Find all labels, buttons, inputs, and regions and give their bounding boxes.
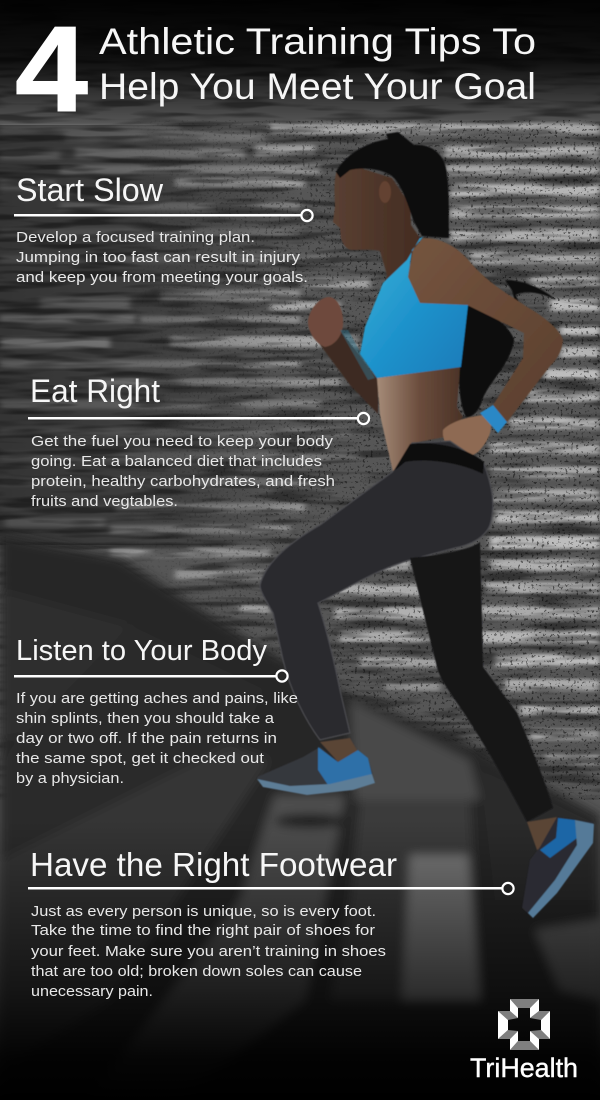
body text: and keep you from meeting your goals. — [16, 270, 308, 286]
body text: Develop a focused training plan. — [16, 230, 255, 246]
body text: by a physician. — [16, 771, 124, 787]
heading: Eat Right — [30, 373, 160, 409]
body text: Just as every person is unique, so is every foot. — [31, 904, 376, 920]
hand — [443, 415, 491, 456]
far arm and fist — [308, 297, 378, 414]
body text: going. Eat a balanced diet that includes — [31, 454, 322, 470]
logo wordmark: TriHealth — [470, 1053, 578, 1083]
sports bra — [360, 237, 468, 378]
tip 4: have the right footwear — [28, 846, 514, 1000]
connector line — [28, 413, 369, 424]
heading: Start Slow — [16, 172, 164, 208]
icon: cross — [498, 999, 550, 1050]
heading: Listen to Your Body — [16, 635, 267, 667]
waistband — [393, 443, 484, 474]
back shoe — [522, 817, 594, 918]
body text: Jumping in too fast can result in injury — [16, 250, 301, 266]
body text: the same spot, get it checked out — [16, 751, 264, 767]
title line 2: Help You Meet Your Goal — [99, 66, 536, 107]
title — [15, 1, 536, 137]
torso — [377, 367, 463, 472]
body text: day or two off. If the pain returns in — [16, 731, 277, 747]
body text: fruits and vegtables. — [31, 494, 178, 510]
body text: your feet. Make sure you aren’t training in shoes — [31, 944, 386, 960]
connector line — [28, 883, 514, 894]
body text: Get the fuel you need to keep your body — [31, 434, 334, 450]
body text: protein, healthy carbohydrates, and fresh — [31, 474, 335, 490]
body text: unecessary pain. — [31, 984, 153, 1000]
hair — [336, 132, 449, 238]
body text: shin splints, then you should take a — [16, 711, 275, 727]
front shoe — [257, 738, 375, 795]
wristband — [480, 405, 507, 433]
numeral 4: 4 — [15, 1, 88, 137]
leggings back leg — [410, 542, 553, 822]
neck and face — [333, 168, 420, 285]
connector line — [14, 210, 313, 221]
logo: TriHealth — [470, 999, 578, 1083]
title line 1: Athletic Training Tips To — [99, 21, 536, 62]
body text — [31, 434, 335, 510]
near arm — [408, 238, 563, 422]
body text — [16, 691, 298, 787]
body text: that are too old; broken down soles can cause — [31, 964, 362, 980]
body text — [31, 904, 386, 1000]
tip 1: start slow — [14, 172, 313, 286]
runner photo illustration — [257, 132, 594, 918]
body text: If you are getting aches and pains, like — [16, 691, 298, 707]
stairs — [0, 535, 600, 1100]
lower ponytail — [459, 300, 514, 417]
connector line — [14, 670, 288, 682]
tip 3: listen to your body — [14, 635, 298, 787]
leggings front leg — [260, 441, 493, 740]
ear — [379, 181, 391, 203]
body text — [16, 230, 308, 286]
heading: Have the Right Footwear — [30, 846, 397, 883]
body text: Take the time to find the right pair of shoes for — [31, 923, 375, 939]
tip 2: eat right — [28, 373, 369, 510]
